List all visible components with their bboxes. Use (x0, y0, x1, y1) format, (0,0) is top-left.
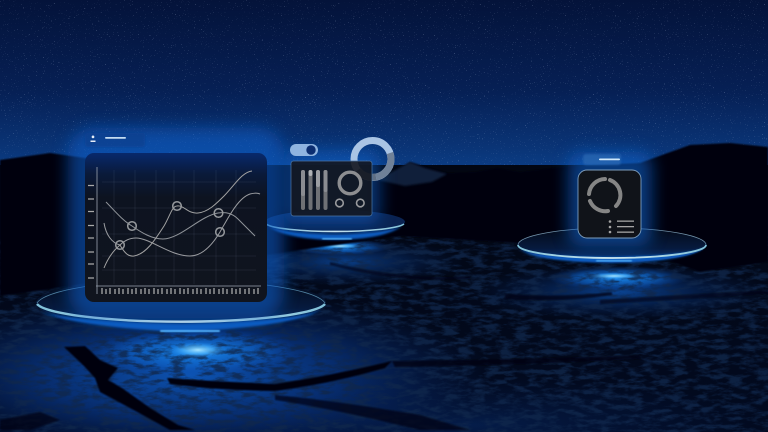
control panel glow (284, 150, 380, 224)
legend list (609, 220, 634, 233)
y-axis ticks (88, 186, 94, 278)
stars (0, 0, 768, 165)
line series C (104, 171, 252, 268)
donut chart (589, 179, 620, 211)
donut card header (583, 154, 621, 165)
mountain silhouette (0, 143, 768, 296)
night sky (0, 0, 768, 185)
ground cracks (0, 262, 768, 430)
header line (105, 137, 126, 139)
donut widget (354, 140, 391, 178)
line series B (104, 193, 260, 256)
line series A (106, 202, 255, 239)
chart grid (102, 170, 256, 284)
donut card glow (568, 152, 652, 246)
platform: left (36, 278, 326, 332)
chart axes (96, 167, 261, 294)
platform: middle (265, 210, 405, 240)
platform: right (517, 228, 707, 263)
dial (339, 172, 361, 194)
small dials (336, 199, 364, 207)
x-axis ticks (102, 288, 258, 294)
sliders (301, 170, 328, 210)
ground (0, 165, 768, 432)
toggle switch (290, 144, 318, 156)
chart panel glow (68, 128, 284, 318)
chart panel (85, 153, 267, 302)
donut card (578, 170, 641, 238)
control panel (291, 161, 372, 216)
chart header tab (85, 133, 145, 147)
data point markers (116, 202, 224, 249)
mountain highlight (378, 162, 447, 186)
icon: user (90, 136, 96, 142)
